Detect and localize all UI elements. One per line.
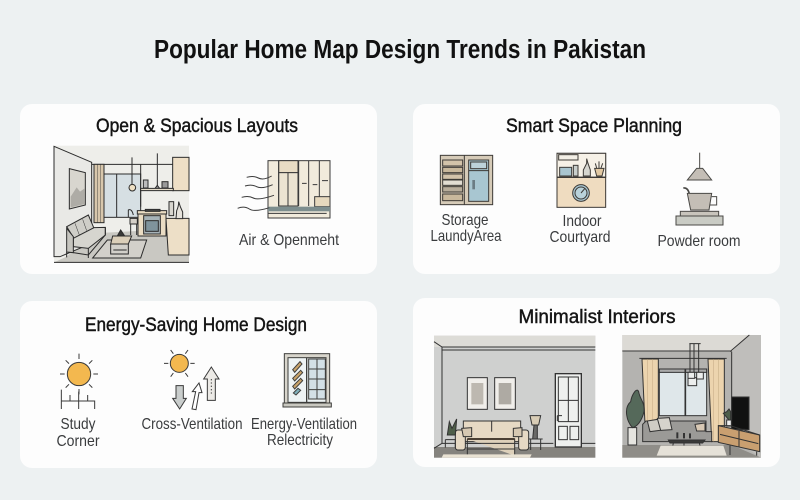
icon: air and openness diagram — [238, 161, 330, 218]
label: powder room: Powder room — [658, 233, 740, 250]
label: storage laundry area: LaundyArea — [430, 228, 502, 245]
label: indoor courtyard: Courtyard — [550, 229, 610, 246]
icon: pendant lamp and cup — [676, 153, 723, 225]
label: study corner: Corner — [56, 433, 100, 450]
panel: smart space planning — [413, 104, 780, 274]
label: energy-ventilation relectricity: Energy-Ventilation — [251, 416, 357, 433]
label: cross-ventilation: Cross-Ventilation — [142, 416, 242, 433]
icon: washing machine — [557, 153, 606, 207]
icon: sun and ventilation arrows — [164, 350, 219, 410]
label: energy-ventilation relectricity — [251, 416, 357, 449]
label: study corner — [56, 416, 100, 450]
panel: minimalist interiors — [413, 298, 780, 467]
label: study corner: Study — [60, 416, 96, 433]
title: Popular Home Map Design Trends in Pakistan — [154, 36, 646, 64]
label: storage laundry area — [430, 212, 502, 245]
label: energy-ventilation relectricity: Relectricity — [267, 432, 333, 449]
illustration: open plan living room and kitchen — [54, 146, 189, 262]
label: air and openment: Air & Openmeht — [239, 232, 339, 249]
icon: energy-efficient window — [283, 354, 331, 407]
icon: sun with ruler — [60, 354, 98, 409]
heading: open and spacious layouts: Open & Spacious Layouts — [96, 115, 298, 137]
panel: open and spacious layouts — [20, 104, 377, 274]
heading: energy-saving home design: Energy-Saving Home Design — [85, 314, 307, 336]
heading: minimalist interiors: Minimalist Interiors — [518, 306, 676, 328]
label: storage laundry area: Storage — [442, 212, 489, 229]
illustration: minimalist living room with door — [434, 336, 595, 458]
label: indoor courtyard — [550, 213, 610, 246]
panel: energy-saving home design — [20, 301, 377, 468]
icon: storage and fridge — [440, 155, 493, 205]
label: indoor courtyard: Indoor — [562, 213, 602, 230]
illustration: minimalist living room with window and tv — [622, 335, 761, 458]
heading: smart space planning: Smart Space Planning — [506, 115, 682, 137]
